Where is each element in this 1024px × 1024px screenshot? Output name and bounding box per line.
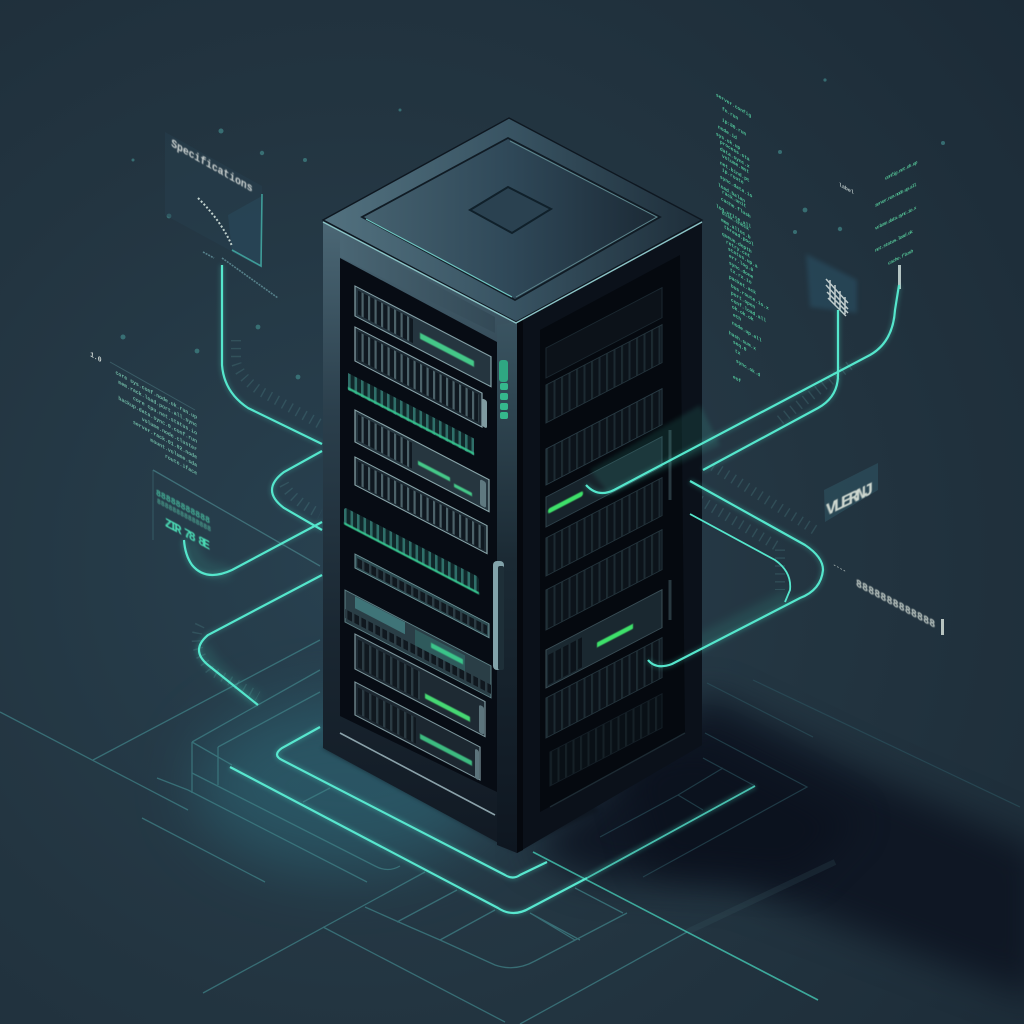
panel: code list (left): 1.0 xyxy=(90,351,102,365)
panel: code column (top right): seq.0 xyxy=(733,339,746,353)
particles xyxy=(120,78,945,379)
right unit 8 xyxy=(546,638,662,738)
panel: grid badge (right) xyxy=(806,254,857,316)
right unit 7 xyxy=(546,590,662,688)
panel: code column (top right): sync.ok.d xyxy=(736,358,760,379)
faint floor strip xyxy=(687,862,835,932)
right unit 2 xyxy=(546,325,662,423)
tower right recess xyxy=(540,255,685,812)
tower top xyxy=(323,118,702,322)
panel: code list (left) xyxy=(90,351,198,477)
panel: code column (top right): tx.rx.io xyxy=(730,267,752,286)
panel: code list (left): backup.data.sync.0.conf.run xyxy=(118,394,197,445)
panel: code column (top right): cache.flush xyxy=(721,196,751,220)
panel: code column (top right): thread.pool xyxy=(724,224,754,248)
tower left face xyxy=(323,222,517,853)
floor shadow xyxy=(530,695,1024,1000)
badge label (right): VLERNJ xyxy=(826,478,874,522)
right unit 6 xyxy=(546,530,662,630)
panel: green readout (lower left): 88888888888 xyxy=(156,487,210,527)
right server units xyxy=(546,288,685,807)
right unit 9 xyxy=(550,694,662,786)
floor lines in shadow xyxy=(600,680,1020,877)
panel: green readout (lower left): 88888888888888 xyxy=(157,498,211,535)
tower right face xyxy=(517,222,702,853)
panel: code list (left): volume.node.cluster xyxy=(142,415,197,453)
badge label (right) xyxy=(824,463,878,522)
panel: code column (top right): node.id xyxy=(718,124,737,141)
recess top bevel xyxy=(340,233,495,333)
dotted label (right) xyxy=(833,561,944,635)
panel: code column (top right): eof xyxy=(733,374,741,385)
panel: code lines (far right) xyxy=(875,159,917,267)
panel: code column (top right): packet.ack xyxy=(729,274,756,296)
panel: code column (top right): disk.check xyxy=(722,210,749,232)
unit 3 xyxy=(348,373,474,456)
unit 1 xyxy=(355,286,491,387)
unit 4 xyxy=(355,410,489,512)
panel: code column (top right): mem.alloc.b xyxy=(721,217,751,241)
panel: code lines (far right): server.run.node.up.all xyxy=(875,182,916,209)
connector D xyxy=(199,575,322,705)
dotted label (right): 8888888888888 xyxy=(856,578,935,632)
connector bar (far right) xyxy=(898,265,901,289)
panel: code lines (far right): net.status.load.ok xyxy=(875,229,913,254)
tower left recess xyxy=(340,258,497,792)
top square plate xyxy=(470,187,551,233)
panel: code column (top right): err.log.0 xyxy=(729,253,753,274)
right unit 1 xyxy=(546,288,662,378)
panel: code column (top right): server.config xyxy=(716,92,751,119)
panel: code column (top right): conf.load.all xyxy=(731,297,766,324)
panel: code lines (far right): volume.data.sync.io.x xyxy=(875,205,916,232)
panel: code column (top right): rack.unit xyxy=(722,189,746,210)
floor outline outer xyxy=(230,767,587,913)
floor line to bottom right xyxy=(533,852,818,1000)
unit 9 xyxy=(355,634,485,737)
status LEDs xyxy=(499,360,508,419)
connector ticks xyxy=(197,340,850,696)
unit 2 xyxy=(355,327,487,430)
panel: code list (left): route.iface xyxy=(165,452,198,477)
panel: code column (top right): sync.done xyxy=(729,260,753,281)
top inset panel xyxy=(362,138,660,300)
panel footer xyxy=(203,252,278,298)
panel: code column (top right): ip:80.run xyxy=(722,117,746,138)
door handle xyxy=(493,561,504,670)
panel: code column (top right): status.up.a xyxy=(728,246,758,270)
panel: code column (top right): sync.data.io xyxy=(720,174,752,200)
panel: code column (top right): process.sta xyxy=(720,139,750,163)
panel: code list (left): mount.volume.sda xyxy=(150,436,198,469)
panel: code column (top right) xyxy=(716,92,769,385)
panel heading: Specifications xyxy=(171,138,253,196)
panel: code list (left): core sys.conf.node.ok.run.up xyxy=(116,369,198,421)
panel: code column (top right): data.sync.x xyxy=(720,146,750,170)
panel: code column (top right): ok.ok.ok xyxy=(732,304,754,323)
left server units xyxy=(344,286,491,781)
connector E xyxy=(586,285,899,493)
panel: code column (top right): bus.route.io.x xyxy=(731,283,769,312)
panel: code column (top right): hash.sum.x xyxy=(729,330,756,352)
panel: code list (left): mem.rack.load.port.all.sync xyxy=(118,378,197,429)
floor grid lines xyxy=(0,640,687,1024)
dotted label (right): ---- xyxy=(833,561,846,575)
panel: green readout (lower left): ZIR 78 8E xyxy=(165,515,210,554)
corner pillar xyxy=(497,322,517,853)
right corner edge xyxy=(517,320,523,853)
right unit 5 xyxy=(546,478,662,576)
right unit 4 xyxy=(546,437,662,527)
connector B xyxy=(272,451,322,530)
connector glow bands xyxy=(190,540,790,700)
panel: code column (top right): port.open xyxy=(731,290,755,311)
unit 7 xyxy=(355,554,489,638)
panel: code column (top right): tx xyxy=(735,348,740,357)
unit 10 xyxy=(355,682,480,781)
panel: code column (top right): net.bind.pt xyxy=(720,160,750,184)
lower bezel highlight xyxy=(340,733,495,815)
connector glows left xyxy=(184,265,322,705)
panel: code column (top right): retry.cnt xyxy=(726,239,750,260)
floor outline glow xyxy=(230,727,755,913)
right recess bottom line xyxy=(550,733,685,807)
chart dotted line xyxy=(198,198,232,246)
unit 5 xyxy=(355,457,487,554)
unit 6 xyxy=(344,507,479,595)
floor glow xyxy=(195,700,495,870)
small label (top right): label xyxy=(839,181,854,197)
panel: green readout (lower left) xyxy=(153,470,320,566)
panel: code list (left): core cpu.net.status.io xyxy=(133,395,198,437)
panel: code column (top right): fn.run xyxy=(722,106,738,122)
panel: code column (top right): sys.ok.up xyxy=(716,131,740,152)
server tower xyxy=(322,118,702,853)
right unit 3 xyxy=(546,389,662,485)
panel: code column (top right): ip.route xyxy=(722,167,744,186)
connector G xyxy=(648,481,823,666)
panel: code lines (far right): cache.flush xyxy=(888,248,913,267)
panel: code column (top right): log.write.all xyxy=(716,203,751,230)
connector C xyxy=(184,522,322,575)
tower contact shadow xyxy=(322,720,600,850)
panel: code column (top right): load.balan xyxy=(718,182,745,204)
connector H xyxy=(690,514,790,602)
panel: code column (top right): volume.mnt xyxy=(722,153,749,175)
panel: code column (top right): eth xyxy=(733,312,741,323)
panel: specifications chart (top left) xyxy=(165,132,278,298)
panel: code list (left): server.rack.01.02.node xyxy=(133,419,198,461)
right connector glow xyxy=(586,285,899,666)
connector A xyxy=(222,265,322,444)
connector F xyxy=(703,310,838,470)
right side hardware xyxy=(668,430,672,620)
panel: code column (top right): queue.depth xyxy=(722,231,752,255)
floor outline far side xyxy=(587,786,755,878)
panel: code lines (far right): config.net.ok.up xyxy=(885,159,917,182)
panel: code column (top right): node.up.all xyxy=(732,320,762,344)
right connector shading xyxy=(590,405,720,495)
floor outline inner xyxy=(277,727,547,878)
unit 8 xyxy=(345,590,491,698)
